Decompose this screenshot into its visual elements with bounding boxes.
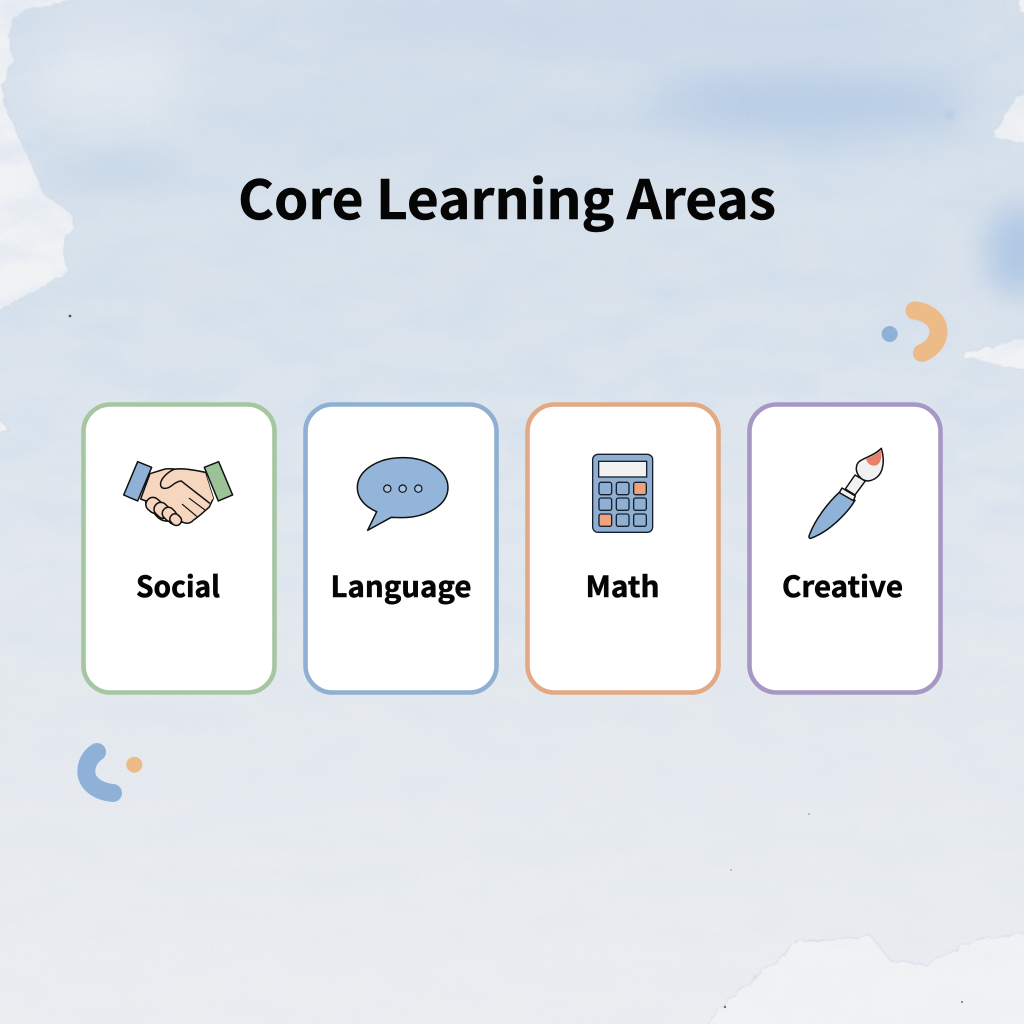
label: Creative: Creative [782,564,903,606]
title: Core Learning Areas [238,156,776,235]
icon: paintbrush [809,448,883,538]
decoration: orange arc with blue dot [882,310,938,353]
card: Creative [750,404,940,692]
decoration: blue arc with orange dot [86,752,142,793]
card frame: Math [528,404,718,692]
label: Social: Social [136,564,220,606]
icon: calculator [593,454,653,532]
icon: handshake [124,462,233,527]
card: Language [306,404,496,692]
card: Social [84,404,274,692]
icon: speech bubble [357,458,448,530]
card: Math [528,404,718,692]
label: Math: Math [586,564,660,606]
card frame: Social [84,404,274,692]
card frame: Creative [750,404,940,692]
card frame: Language [306,404,496,692]
label: Language: Language [330,564,472,606]
